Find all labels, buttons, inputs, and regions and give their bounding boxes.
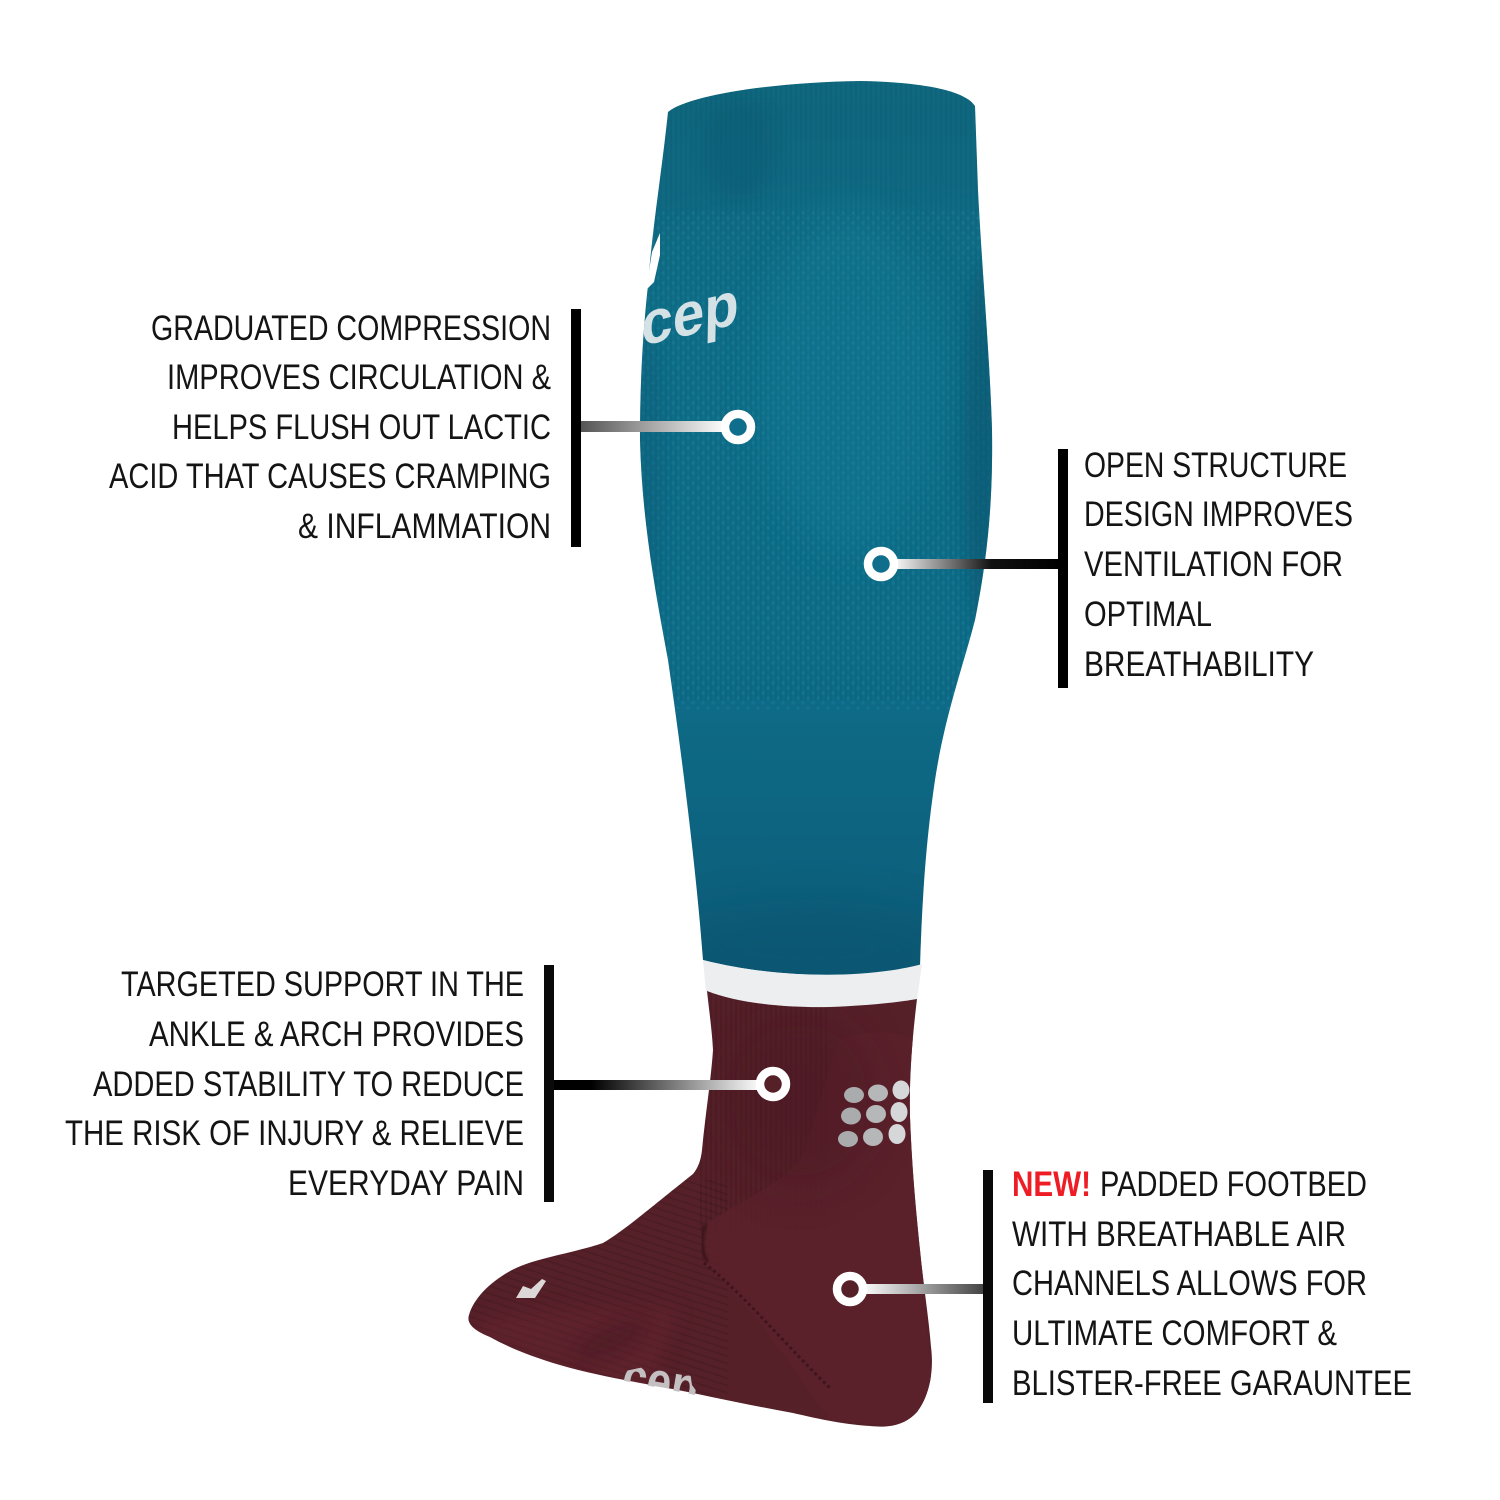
vertical bar <box>544 965 554 1202</box>
text block: IMPROVES CIRCULATION & <box>167 358 551 397</box>
text block: PADDED FOOTBED <box>1100 1165 1367 1204</box>
white band <box>703 960 922 1008</box>
callout: targeted support <box>65 965 786 1203</box>
marker <box>837 1276 863 1302</box>
cep logo on calf: cep <box>641 268 739 359</box>
text block: CHANNELS ALLOWS FOR <box>1012 1264 1367 1303</box>
text block: EVERYDAY PAIN <box>288 1164 524 1203</box>
text block: DESIGN IMPROVES <box>1084 495 1353 534</box>
callout: open structure <box>868 446 1353 688</box>
connector <box>861 1284 983 1294</box>
logo tick at sock edge <box>646 233 660 290</box>
text block: ANKLE & ARCH PROVIDES <box>149 1015 524 1054</box>
text block <box>1084 446 1353 684</box>
text block <box>65 965 524 1203</box>
sock foot: maroon <box>468 990 935 1430</box>
text block: GRADUATED COMPRESSION <box>151 309 551 348</box>
text block: VENTILATION FOR <box>1084 545 1343 584</box>
text block <box>1012 1165 1412 1403</box>
text block: BREATHABILITY <box>1084 645 1314 684</box>
marker <box>868 551 894 577</box>
text block: THE RISK OF INJURY & RELIEVE <box>65 1114 524 1153</box>
callout: padded footbed <box>837 1165 1412 1403</box>
sock illustration <box>468 80 1007 1430</box>
text block: OPEN STRUCTURE <box>1084 446 1347 485</box>
callout: graduated compression <box>109 309 751 547</box>
text block <box>109 309 551 546</box>
text block: & INFLAMMATION <box>298 507 551 546</box>
vertical bar <box>1058 449 1068 688</box>
text block: TARGETED SUPPORT IN THE <box>121 965 524 1004</box>
marker <box>760 1071 786 1097</box>
text block: ACID THAT CAUSES CRAMPING <box>109 457 551 496</box>
text block: OPTIMAL <box>1084 595 1212 634</box>
connector <box>892 559 1058 569</box>
connector <box>554 1080 762 1090</box>
text block: NEW! <box>1012 1165 1091 1204</box>
logo dots on ankle <box>838 1080 910 1147</box>
sole logo text: cep <box>618 1344 703 1418</box>
toe mark <box>516 1279 546 1298</box>
connector <box>581 421 727 432</box>
marker <box>725 414 751 440</box>
text block: ADDED STABILITY TO REDUCE <box>93 1065 524 1104</box>
vertical bar <box>983 1170 993 1403</box>
text block: BLISTER-FREE GARAUNTEE <box>1012 1364 1412 1403</box>
text block: WITH BREATHABLE AIR <box>1012 1215 1346 1254</box>
text block: HELPS FLUSH OUT LACTIC <box>172 408 551 447</box>
sock upper: teal calf sleeve <box>630 80 1007 1000</box>
text block: ULTIMATE COMFORT & <box>1012 1314 1337 1353</box>
vertical bar <box>571 309 581 547</box>
